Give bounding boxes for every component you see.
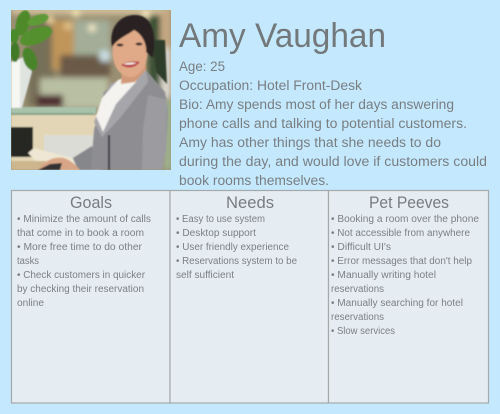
persona details and bio: [179, 59, 487, 188]
vase and plant: [9, 9, 55, 108]
list: goals: [17, 214, 151, 309]
list: pet peeves: • Not accessible from anywhere: [331, 228, 470, 239]
list: needs: • Reservations system to be: [176, 256, 297, 267]
persona details and bio: Amy has other things that she needs to do: [179, 135, 441, 150]
list: needs: • User friendly experience: [176, 242, 289, 253]
desk: [11, 107, 101, 170]
list: pet peeves: • Booking a room over the phone: [331, 214, 479, 225]
list: pet peeves: • Manually searching for hotel: [331, 298, 463, 309]
heading: needs: Needs: [226, 193, 274, 212]
list: pet peeves: reservations: [331, 312, 384, 323]
list: needs: • Desktop support: [176, 228, 256, 239]
list: pet peeves: • Slow services: [331, 326, 395, 337]
list: pet peeves: [331, 214, 479, 337]
panel: pet peeves: [328, 190, 488, 403]
list: pet peeves: • Error messages that don't help: [331, 256, 472, 267]
list: needs: • Easy to use system: [176, 214, 265, 225]
panel: goals: [12, 190, 170, 403]
woman: [38, 15, 168, 170]
list: goals: • Minimize the amount of calls: [17, 214, 151, 225]
persona details and bio: Age: 25: [179, 59, 225, 74]
list: pet peeves: • Difficult UI's: [331, 242, 391, 253]
list: goals: • More free time to do other: [17, 242, 143, 253]
list: goals: online: [17, 298, 44, 309]
heading: goals: Goals: [70, 193, 112, 212]
persona details and bio: during the day, and would love if customers could: [179, 154, 487, 169]
name heading: Amy Vaughan: [179, 17, 386, 55]
list: goals: • Check customers in quicker: [17, 270, 146, 281]
list: goals: by checking their reservation: [17, 284, 144, 295]
panel: needs: [170, 190, 328, 403]
persona details and bio: Occupation: Hotel Front-Desk: [179, 78, 362, 93]
list: pet peeves: reservations: [331, 284, 384, 295]
photo: hotel receptionist: [9, 8, 171, 170]
list: pet peeves: • Manually writing hotel: [331, 270, 436, 281]
list: goals: tasks: [17, 256, 39, 267]
heading: pet peeves: Pet Peeves: [369, 193, 449, 212]
list: needs: self sufficient: [176, 270, 234, 281]
list: goals: that come in to book a room: [17, 228, 144, 239]
persona details and bio: book rooms themselves.: [179, 173, 329, 188]
persona details and bio: Bio: Amy spends most of her days answering: [179, 97, 454, 112]
persona details and bio: phone calls and talking to potential customers.: [179, 116, 467, 131]
list: needs: [176, 214, 297, 281]
